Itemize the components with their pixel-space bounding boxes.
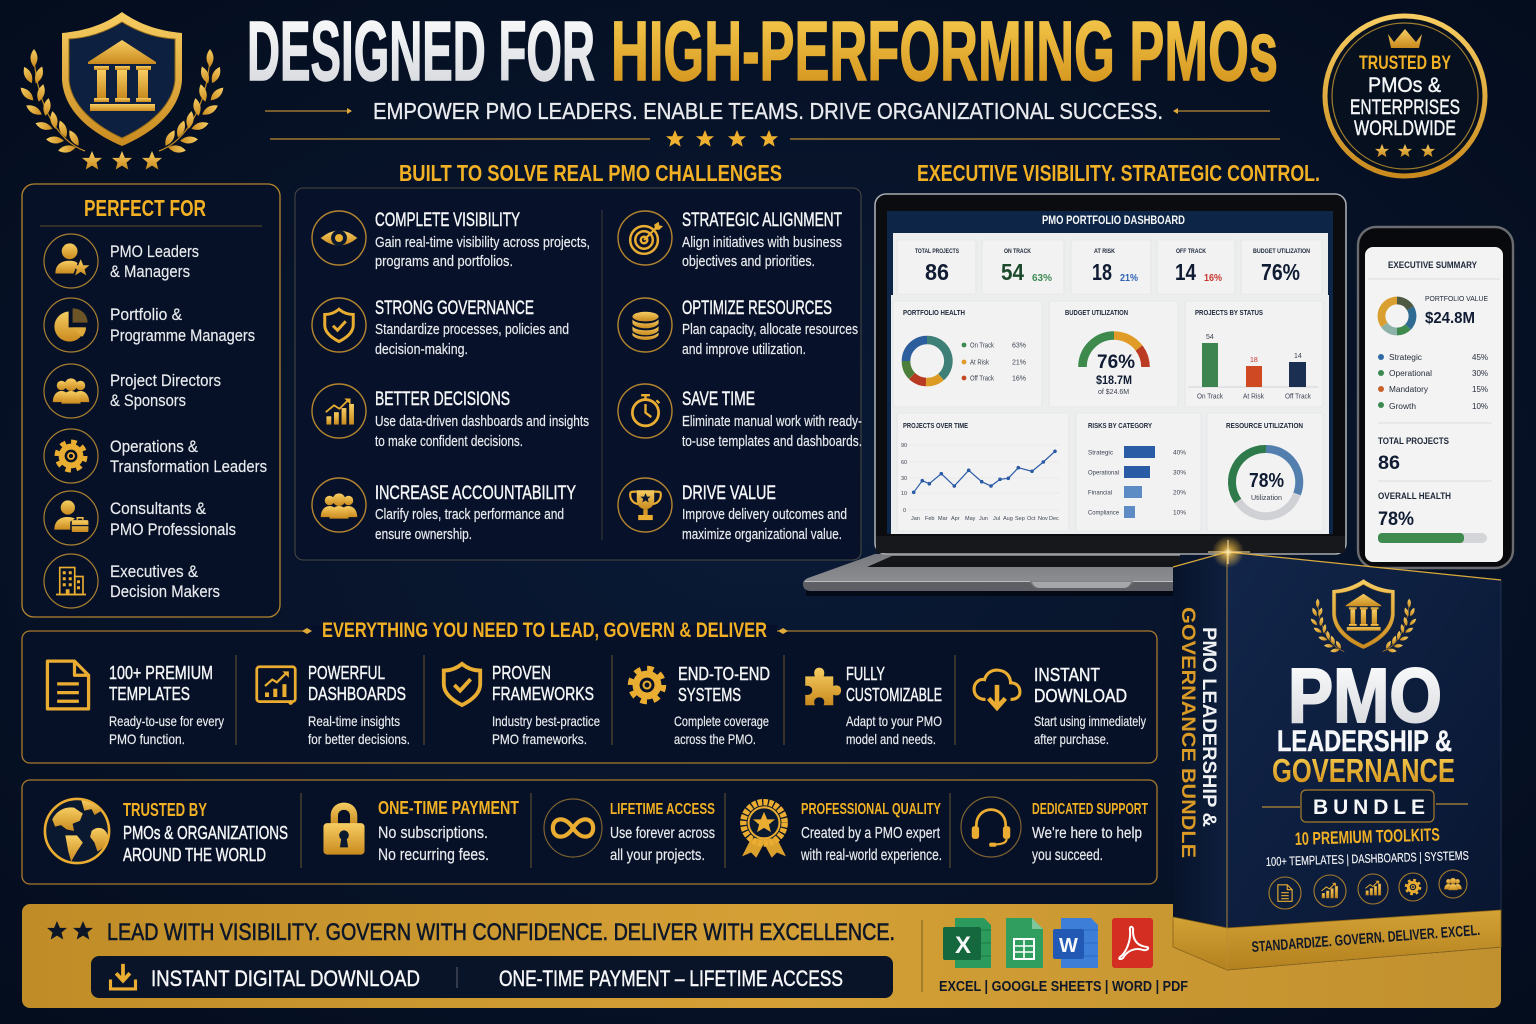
challenge: complete visibility: COMPLETE VISIBILITY [375,210,520,231]
KPI cards: 18 [1092,259,1112,285]
challenge: drive value [618,478,847,543]
feature: proven frameworks: Industry best-practice [492,713,600,729]
feature: end-to-end systems: SYSTEMS [678,684,741,705]
trust: professional quality: PROFESSIONAL QUALITY [801,801,941,818]
projects by status chart: PROJECTS BY STATUS [1195,308,1263,317]
icon: google sheets [1006,918,1043,968]
projects over time line chart: Oct [1027,516,1036,522]
trust: worldwide [45,799,288,865]
badge: trusted by [1325,16,1485,176]
item: project directors [44,364,221,418]
laptop lid [875,194,1346,554]
projects over time line chart: Mar [938,516,948,522]
KPI cards: TOTAL PROJECTS [915,248,959,255]
box side text [1177,607,1219,858]
projects over time line chart: Jun [979,516,988,522]
feature: end-to-end systems: END-TO-END [678,663,770,684]
subtitle: EMPOWER PMO LEADERS. ENABLE TEAMS. DRIVE ORGANIZATIONAL SUCCESS. [373,98,1163,124]
portfolio health donut: 21% [1012,360,1026,366]
badge: trusted by: ENTERPRISES [1350,96,1460,119]
risks by category chart: Financial [1088,490,1113,496]
challenge: save time: Eliminate manual work with ready- [682,414,862,430]
trust: lifetime access: LIFETIME ACCESS [610,801,715,818]
box logo [1309,579,1417,653]
download pill: ONE-TIME PAYMENT – LIFETIME ACCESS [499,966,843,991]
feature: powerful dashboards [257,662,410,747]
box side text: GOVERNANCE BUNDLE [1177,607,1198,858]
box title: PMO: PMO [1288,653,1442,739]
risks by category chart [1088,421,1186,518]
box side text: PMO LEADERSHIP & [1198,627,1219,827]
item: project directors: Project Directors [110,371,221,390]
toolkit count: 10 PREMIUM TOOLKITS [1294,824,1440,849]
projects over time line chart [901,421,1060,522]
portfolio health donut: At Risk [970,360,989,366]
slogan: LEAD WITH VISIBILITY. GOVERN WITH CONFIDENCE. DELIVER WITH EXCELLENCE. [107,919,895,946]
icon: word [1053,918,1098,968]
projects by status chart: At Risk [1243,394,1264,400]
resource utilization donut [1226,421,1303,516]
budget utilization gauge: $18.7M [1096,373,1132,387]
projects over time line chart: Nov [1038,516,1048,522]
portfolio health donut [903,308,1026,382]
item: portfolio managers [44,298,255,352]
trust: lifetime access: Use forever across [610,825,715,842]
projects over time line chart: May [965,516,976,522]
phone: executive summary: 30% [1472,369,1488,378]
feature: premium templates: TEMPLATES [109,683,190,704]
gold call-to-action band [22,904,1501,1008]
panel: perfect for [22,184,280,617]
challenge: optimize resources: and improve utilization. [682,342,806,358]
portfolio health donut: On Track [970,342,994,350]
projects over time line chart: Jan [911,516,920,522]
budget utilization gauge [1065,308,1146,396]
challenge: complete visibility [312,210,590,270]
trust: dedicated support: you succeed. [1032,847,1103,864]
panel: everything you need [22,619,1157,763]
challenge: better decisions [312,384,589,450]
challenge: strategic alignment: objectives and priorities. [682,254,815,270]
projects over time line chart: Dec [1049,516,1059,522]
trust: one-time payment: ONE-TIME PAYMENT [378,798,519,818]
feature: instant download [974,664,1146,747]
risks by category chart: RISKS BY CATEGORY [1088,421,1152,430]
item: executives: Decision Makers [110,582,220,601]
trust: dedicated support [961,797,1148,864]
badge: trusted by: PMOs & [1368,74,1441,97]
risks by category chart: 40% [1173,450,1186,456]
challenge: increase accountability: Clarify roles, track performance and [375,507,564,523]
box icon row [1269,870,1467,909]
projects by status chart: On Track [1197,394,1223,400]
phone: executive summary: EXECUTIVE SUMMARY [1388,260,1477,270]
challenge: drive value: maximize organizational value. [682,527,842,543]
panel: trust strip [22,780,1157,884]
trust: professional quality [742,801,942,864]
KPI cards: AT RISK [1094,248,1115,255]
portfolio health donut: 16% [1012,376,1026,382]
feature: proven frameworks: PROVEN [492,662,551,683]
challenge: better decisions: Use data-driven dashboards and insights [375,414,589,430]
challenge: save time: SAVE TIME [682,389,755,410]
challenge: better decisions: to make confident decisions. [375,434,523,450]
risks by category chart: Compliance [1088,510,1119,516]
risks by category chart: Strategic [1088,450,1114,456]
projects over time line chart: 30 [901,476,907,482]
KPI cards: OFF TRACK [1176,248,1206,255]
feature: end-to-end systems: across the PMO. [674,731,756,747]
challenge: strong governance: decision-making. [375,342,468,358]
challenge: complete visibility: Gain real-time visibility across projects, [375,235,590,251]
challenge: strong governance [312,298,569,358]
trust: dedicated support: We're here to help [1032,825,1142,842]
item: operations leaders: Transformation Leaders [110,457,267,476]
phone: executive summary: 45% [1472,353,1488,362]
item: executives [44,554,220,608]
product box: PMO leadership and governance bundle [1173,536,1501,970]
KPI cards: 76% [1261,259,1300,285]
logo: gold shield with laurels [18,12,226,170]
heading: everything you need: EVERYTHING YOU NEED TO LEAD, GOVERN & DELIVER [322,619,767,642]
feature: fully customizable: model and needs. [846,731,936,747]
projects over time line chart: Aug [1003,516,1013,522]
challenge: optimize resources: OPTIMIZE RESOURCES [682,298,832,319]
KPI cards [915,248,1310,285]
challenge: optimize resources [618,298,858,358]
download pill: INSTANT DIGITAL DOWNLOAD [151,966,420,991]
phone: executive summary: 86 [1378,453,1400,474]
projects by status chart: 18 [1250,357,1258,364]
feature: instant download: Start using immediately [1034,713,1146,729]
bundle tag: BUNDLE [1313,796,1425,819]
feature: fully customizable: CUSTOMIZABLE [846,684,942,705]
box title: leadership: LEADERSHIP & [1277,725,1452,758]
resource utilization donut: RESOURCE UTILIZATION [1226,421,1303,430]
projects over time line chart: PROJECTS OVER TIME [903,421,968,430]
heading: challenges: BUILT TO SOLVE REAL PMO CHALLENGES [399,160,782,186]
resource utilization donut: 78% [1249,470,1284,492]
feature: powerful dashboards: POWERFUL [308,662,385,683]
feature: instant download: INSTANT [1034,664,1100,685]
feature: proven frameworks: PMO frameworks. [492,731,587,747]
KPI cards: 21% [1120,273,1138,284]
KPI cards: 16% [1204,273,1222,284]
budget utilization gauge: of $24.6M [1098,389,1129,396]
feature: premium templates [47,661,224,747]
icon: excel: X [955,932,971,959]
trust: one-time payment: No recurring fees. [378,846,489,864]
projects by status chart: 54 [1206,334,1214,341]
challenge: strong governance: STRONG GOVERNANCE [375,298,534,319]
feature: fully customizable: Adapt to your PMO [846,713,942,729]
challenge: strategic alignment: STRATEGIC ALIGNMENT [682,210,842,231]
item: operations leaders: Operations & [110,437,199,456]
risks by category chart: 10% [1173,510,1186,516]
phone: executive summary: PORTFOLIO VALUE [1425,294,1488,303]
portfolio health donut: 63% [1012,342,1026,350]
KPI cards: 63% [1032,273,1052,284]
item: PMO leaders: & Managers [110,262,190,281]
laptop with dashboard [803,194,1346,596]
box side face [1173,552,1227,970]
projects over time line chart: Feb [925,516,934,522]
laptop with dashboard: PMO PORTFOLIO DASHBOARD [1042,215,1185,227]
item: project directors: & Sponsors [110,391,186,410]
feature: fully customizable [805,663,942,747]
challenge: strategic alignment [618,210,842,270]
item: consultants: Consultants & [110,499,207,518]
trust: worldwide: PMOs & ORGANIZATIONS [123,823,288,843]
item: portfolio managers: Portfolio & [110,305,183,324]
challenge: complete visibility: programs and portfolios. [375,254,513,270]
trust: worldwide: AROUND THE WORLD [123,845,266,865]
icon: pdf [1112,918,1153,968]
feature: premium templates: PMO function. [109,731,185,747]
title: DESIGNED FOR [247,4,595,98]
heading: executive visibility: EXECUTIVE VISIBILITY. STRATEGIC CONTROL. [917,160,1320,186]
phone: executive summary: OVERALL HEALTH [1378,491,1451,501]
feature: end-to-end systems [630,663,770,747]
phone: executive summary: TOTAL PROJECTS [1378,436,1449,446]
challenge: drive value: Improve delivery outcomes and [682,507,847,523]
projects over time line chart: 90 [901,443,907,449]
projects by status chart: Off Track [1285,394,1311,400]
challenge: increase accountability: INCREASE ACCOUNTABILITY [375,483,576,504]
budget utilization gauge: 76% [1097,352,1135,373]
phone: executive summary [1358,227,1513,568]
feature: powerful dashboards: DASHBOARDS [308,683,406,704]
feature: end-to-end systems: Complete coverage [674,713,769,729]
KPI cards: 14 [1175,259,1196,285]
budget utilization gauge: BUDGET UTILIZATION [1065,308,1128,317]
trust: professional quality: with real-world experience. [800,847,942,864]
trust: lifetime access: all your projects. [610,847,705,864]
challenge: increase accountability [312,478,576,543]
phone: executive summary: Mandatory [1389,385,1428,394]
KPI cards: ON TRACK [1004,248,1031,255]
challenge: save time: to-use templates and dashboards. [682,434,862,450]
phone: executive summary: 15% [1472,385,1488,394]
title [247,4,1278,98]
challenge: strong governance: Standardize processes, policies and [375,322,569,338]
phone: executive summary: 10% [1472,402,1488,411]
item: operations leaders [44,429,267,483]
feature: instant download: DOWNLOAD [1034,685,1127,706]
item: PMO leaders: PMO Leaders [110,242,199,261]
KPI cards: 86 [925,259,949,285]
phone: executive summary: 78% [1378,509,1414,530]
challenge: optimize resources: Plan capacity, allocate resources [682,322,858,338]
box front face [1227,552,1501,970]
icon: word: W [1059,935,1078,957]
feature: proven frameworks: FRAMEWORKS [492,683,594,704]
trust: worldwide: TRUSTED BY [123,800,207,820]
trust: lifetime access [544,799,715,864]
KPI cards: BUDGET UTILIZATION [1253,248,1310,255]
risks by category chart: 30% [1173,470,1186,476]
feature: premium templates: 100+ PREMIUM [109,662,213,683]
ornament rules and stars [265,108,1280,147]
feature: powerful dashboards: Real-time insights [308,713,400,729]
challenge: strategic alignment: Align initiatives with business [682,235,842,251]
projects over time line chart: 10 [901,491,907,497]
challenge: increase accountability: ensure ownership. [375,527,472,543]
box title: governance: GOVERNANCE [1272,752,1455,789]
file format labels: EXCEL | GOOGLE SHEETS | WORD | PDF [939,979,1188,995]
item: consultants [44,491,236,545]
item: consultants: PMO Professionals [110,520,236,539]
challenge: drive value: DRIVE VALUE [682,483,776,504]
projects over time line chart: Apr [951,516,960,522]
feature: powerful dashboards: for better decisions. [308,731,410,747]
trust: one-time payment [323,798,519,864]
risks by category chart: 20% [1173,490,1186,496]
icon: excel [943,918,991,968]
portfolio health donut: Off Track [970,376,994,382]
projects over time line chart: Jul [993,516,1000,522]
risks by category chart: Operational [1088,470,1120,476]
heading: perfect for: PERFECT FOR [84,195,206,221]
phone: executive summary: Growth [1389,402,1416,411]
feature: premium templates: Ready-to-use for every [109,713,224,729]
download pill [91,956,893,998]
projects by status chart: 14 [1294,353,1302,360]
KPI cards: 54 [1001,259,1024,285]
item: executives: Executives & [110,562,199,581]
projects over time line chart: Sep [1015,516,1025,522]
projects by status chart [1188,308,1318,400]
laptop base [803,554,1180,596]
badge: trusted by: WORLDWIDE [1354,117,1456,140]
phone: executive summary: $24.8M [1425,310,1475,327]
trust: professional quality: Created by a PMO expert [801,825,940,842]
projects over time line chart: 60 [901,460,907,466]
portfolio health donut: PORTFOLIO HEALTH [903,308,965,317]
feature: proven frameworks [444,662,600,747]
challenge: save time [618,384,862,450]
projects over time line chart: 0 [903,508,906,514]
resource utilization donut: Utilization [1251,495,1282,502]
feature: fully customizable: FULLY [846,663,885,684]
panel: challenges [295,188,862,560]
item: portfolio managers: Programme Managers [110,326,255,345]
phone: executive summary: Strategic [1389,353,1422,362]
challenge: better decisions: BETTER DECISIONS [375,389,510,410]
trust: one-time payment: No subscriptions. [378,824,488,842]
item: PMO leaders [44,234,199,288]
badge: trusted by: TRUSTED BY [1359,52,1451,74]
phone: executive summary: Operational [1389,369,1432,378]
feature: instant download: after purchase. [1034,731,1109,747]
bundle tag [1262,790,1468,822]
contents line: 100+ TEMPLATES | DASHBOARDS | SYSTEMS [1266,849,1469,869]
trust: dedicated support: DEDICATED SUPPORT [1032,801,1148,818]
